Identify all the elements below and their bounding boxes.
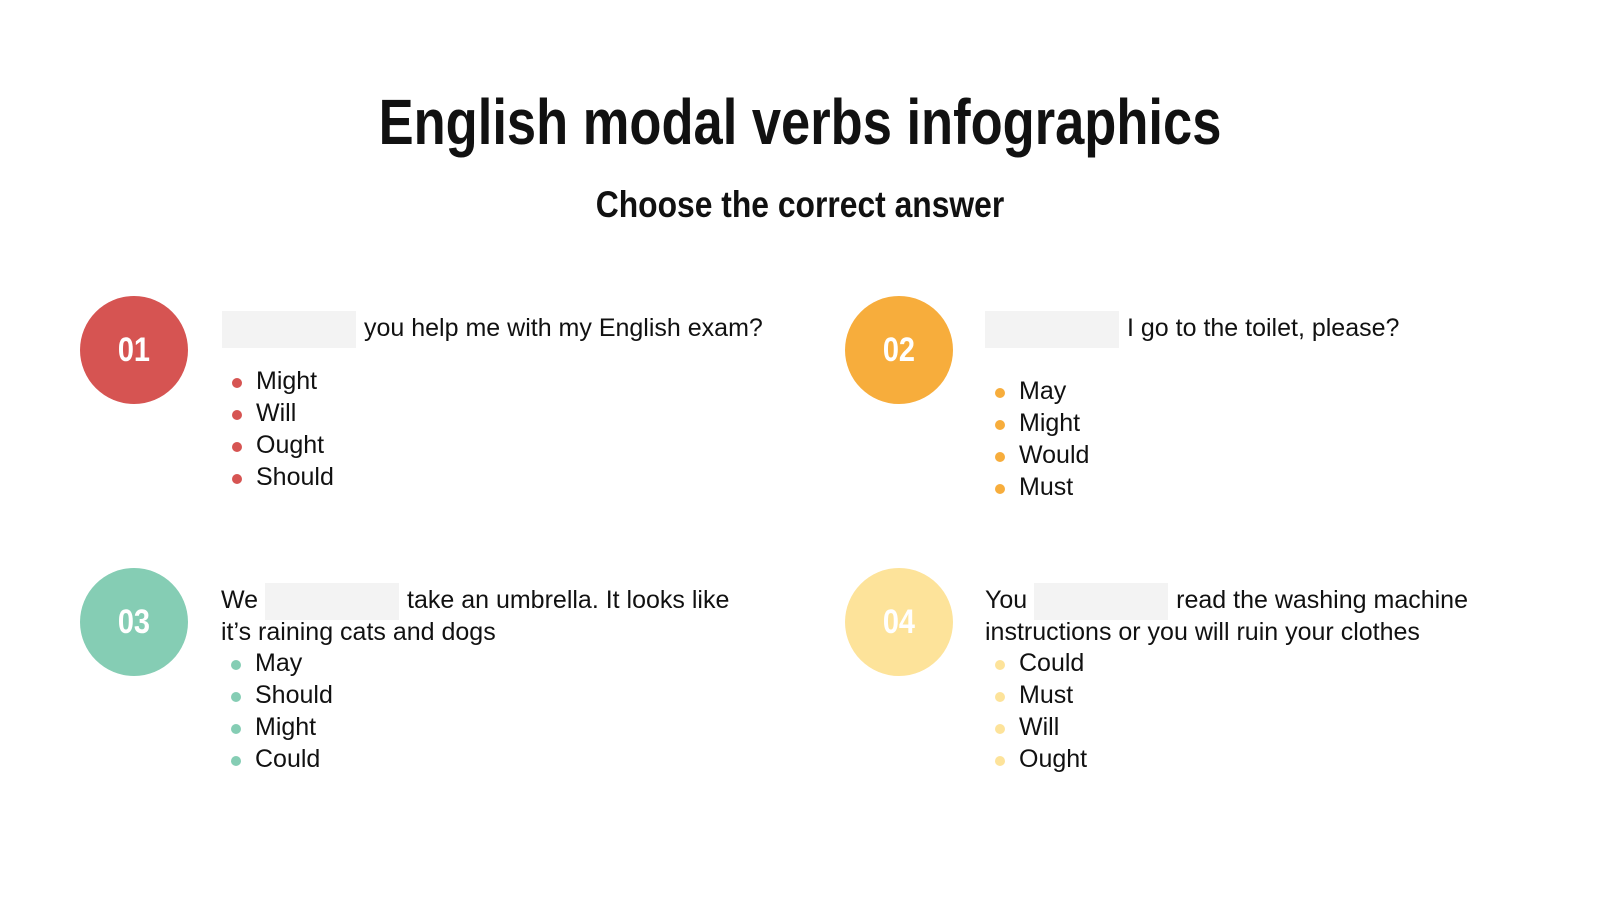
panel: question 01: [80, 296, 763, 491]
question text 04: [985, 583, 1468, 646]
question text 03: it’s raining cats and dogs: [221, 618, 496, 646]
options 04: Could: [1019, 649, 1084, 677]
options 02: Must: [1019, 473, 1073, 501]
question text 03: [221, 583, 729, 646]
options 03: [231, 649, 333, 773]
options 03: May: [255, 649, 302, 677]
options 01: Might: [256, 367, 317, 395]
circle 04: [845, 568, 953, 676]
circle 03: 03: [118, 603, 150, 641]
options 03: Might: [255, 713, 316, 741]
panel: question 02: [845, 296, 1399, 501]
question text 04: You read the washing machine: [985, 586, 1468, 614]
options 01: Ought: [256, 431, 324, 459]
panel: question 04: [845, 568, 1468, 773]
options 02: Might: [1019, 409, 1080, 437]
question text 04: instructions or you will ruin your clothes: [985, 618, 1420, 646]
circle 02: 02: [883, 331, 915, 369]
options 02: Would: [1019, 441, 1089, 469]
question text 01: you help me with my English exam?: [364, 314, 763, 342]
options 03: Should: [255, 681, 333, 709]
options 04: [995, 649, 1087, 773]
subtitle: Choose the correct answer: [596, 184, 1004, 225]
options 03: Could: [255, 745, 320, 773]
circle 01: [80, 296, 188, 404]
question text 01: [222, 311, 763, 348]
circle 02: [845, 296, 953, 404]
panel: question 03: [80, 568, 729, 773]
options 02: May: [1019, 377, 1066, 405]
options 04: Must: [1019, 681, 1073, 709]
options 04: Will: [1019, 713, 1059, 741]
options 02: [995, 377, 1089, 501]
circle 04: 04: [883, 603, 915, 641]
options 04: Ought: [1019, 745, 1087, 773]
question text 02: I go to the toilet, please?: [1127, 314, 1399, 342]
circle 03: [80, 568, 188, 676]
title: English modal verbs infographics: [379, 86, 1221, 158]
question text 02: [985, 311, 1399, 348]
options 01: [232, 367, 334, 491]
options 01: Will: [256, 399, 296, 427]
options 01: Should: [256, 463, 334, 491]
circle 01: 01: [118, 331, 150, 369]
question text 03: We take an umbrella. It looks like: [221, 586, 729, 614]
